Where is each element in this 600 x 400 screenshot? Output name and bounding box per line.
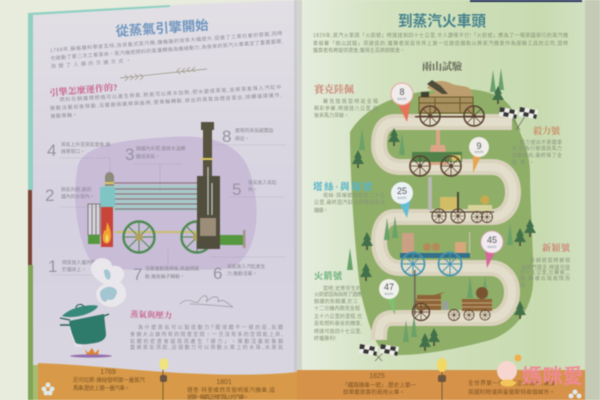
label: Rocket (314, 270, 362, 342)
1830 text (468, 379, 555, 396)
1769: 1769 (100, 369, 116, 376)
pin: 8 km/h: km/h (398, 96, 406, 101)
callout 6: 力,推動活塞。 (227, 270, 257, 277)
callout 2: 熱氣升起,遇到 (61, 186, 91, 193)
callout 6: 蒸氣進入汽缸產生 (227, 263, 266, 270)
intro text: left: 1769年,蘇格蘭科學家瓦特,改良舊式蒸汽機,讓機器的效率大幅提升,促進了工業社會的發展,同時 (50, 30, 283, 54)
callout 3: 3 (125, 145, 134, 164)
pin: 45 km/h: km/h (488, 244, 496, 249)
pin: 25 km/h (391, 182, 413, 218)
label: Cycloped: 塔絲·與瑞號的速度二十五 (323, 192, 385, 199)
1769: 馬車,歷史上第一臺汽車。 (73, 384, 130, 392)
cylinder housing (197, 167, 220, 249)
callout 1: 煤炭放入爐內燃燒 (62, 259, 101, 266)
panel: right timeline band (297, 358, 585, 400)
callout 3 (125, 145, 186, 195)
label: Novelty: 為熱門選手,時速可達 (521, 264, 570, 271)
label: Sans Pareil: 賽克陸佩當時是全場 (323, 98, 378, 105)
callout 5: 內。 (248, 187, 258, 193)
diagram: steam locomotive (88, 122, 246, 252)
train: novelty (400, 232, 470, 276)
wheel front (124, 222, 154, 252)
pin: 9 km/h: km/h (475, 149, 483, 154)
label: Novelty: 新穎號當時被視 (530, 257, 570, 264)
callout 7 (133, 250, 199, 284)
label: Novelty: 圈,鍋爐出現故障而 (520, 275, 570, 282)
intro text: right: 獲獎者有將提供資金,獲得五百英鎊獎金。 (313, 47, 405, 54)
callout 2: 爐內的水管內。 (61, 193, 95, 200)
intro text: right (313, 32, 568, 54)
train: sans pareil (410, 130, 462, 176)
pin: 47 km/h: km/h (385, 291, 393, 296)
callout 4: 過導管口。 (61, 148, 85, 155)
pin: 8 km/h (391, 83, 413, 122)
1801: 1801 (216, 379, 232, 386)
label: Rocket: 五十六公里的里程,也 (314, 313, 362, 320)
left page teal edge strip (28, 5, 170, 190)
pin: 8 km/h: 8 (399, 87, 405, 97)
1830 text: 英國利物浦與曼徹斯特兩個城市。 (468, 388, 555, 396)
text block: steam and pressure: 氣體的密度會提高而產生「壓力」。推動活塞就像鍋 (130, 338, 283, 345)
callout 1: 於爐床上。 (62, 266, 86, 273)
label: Rocket: 終獲勝利! (314, 335, 336, 342)
heading: steam and pressure: 蒸氣與壓力 (130, 309, 172, 320)
timeline bulb (160, 358, 168, 400)
text block: steam and pressure: 為什麼蒸氣可以製造動力?跟液體不一樣的是,氣體 (138, 324, 283, 331)
callout 8: 排出。 (235, 135, 249, 142)
cylinder body over wheel (197, 215, 220, 249)
label: Novelty: 新穎號 (542, 242, 570, 253)
callout 1 (48, 257, 101, 276)
callout 3: 鍋爐內水管,使其水溫轉 (136, 145, 186, 152)
callout 6 (210, 257, 287, 283)
label: Perseverance: 後,因為行駛還過馬力 (512, 145, 562, 152)
label: Rocket: 是有燃料最省的機車, (314, 320, 362, 327)
callout 5: 5 (232, 180, 241, 199)
label: Perseverance (512, 125, 562, 166)
flags: finish top (499, 107, 538, 130)
callout 8: 使用的蒸氣經煙囪 (235, 127, 274, 134)
label: Cycloped: 繼續。 (314, 207, 328, 214)
pin: 9 km/h: 9 (476, 141, 482, 151)
label: Perseverance: 毅力號出不景跟車 (520, 139, 562, 146)
callout 2: 2 (45, 186, 54, 205)
label: Rocket: 時速可達四十七公里, (314, 328, 362, 335)
1825: 1825 (369, 373, 385, 380)
panel: right page (294, 0, 600, 400)
label: Rocket: 火箭號因為採用了適應 (314, 291, 362, 298)
intro text: left (50, 30, 284, 70)
text block: steam and pressure (130, 324, 283, 351)
icon: steam clouds (91, 258, 126, 307)
train: cycloped (428, 177, 494, 223)
purple backdrop blob (75, 137, 257, 270)
left edge illustration strip (28, 190, 38, 400)
train: horse carriage (415, 80, 485, 126)
pin: 25 km/h: km/h (398, 195, 406, 200)
icon: steam pot on flame (60, 304, 112, 358)
callout 5: 蒸氣進入氣缸 (248, 179, 277, 186)
heading: Rainhill trial: 雨山試驗 (422, 60, 463, 73)
label: Perseverance: 毅力號 (533, 125, 560, 136)
callout 7: 7 (133, 265, 142, 284)
pin: 45 km/h: 45 (487, 235, 497, 245)
callout 7: 動,推進輪子轉動。 (145, 273, 185, 280)
train: rocket (412, 270, 492, 320)
pin: 9 km/h (469, 137, 489, 173)
callout 8: 8 (222, 127, 231, 146)
label: Cycloped: 塔絲·與瑞號 (313, 181, 372, 193)
firebox and flame (101, 207, 113, 247)
1825 (342, 373, 416, 396)
callout 6: 6 (213, 264, 222, 283)
callout 4 (47, 141, 111, 175)
pin: 25 km/h: 25 (397, 186, 407, 196)
label: Perseverance: 程獎。 (512, 159, 534, 166)
ornament: wheat divider (120, 67, 207, 81)
tender grid (88, 204, 100, 244)
callout 2 (45, 186, 100, 207)
intro text: left: 改變了人類的交通方式。 (51, 57, 131, 70)
label: Rocket: 十二分鐘內跑完全程 (314, 305, 360, 312)
map: trees (347, 68, 536, 351)
text block: how engine works (49, 84, 282, 120)
piston box (200, 218, 216, 236)
label: Sans Pareil (314, 83, 378, 119)
text block: how engine works: 燃料在鍋爐裡燃燒可以產生熱氣,熱氣可以將水加熱,把水變成蒸氣,並將蒸氣導入汽缸中 (59, 84, 281, 103)
flags: finish bottom (359, 344, 399, 361)
text block: how engine works: 推動活塞前後移動,活塞連接連桿與曲柄,使車輪轉動,排出的蒸氣由煙囪冒出,持續循環運作, (50, 92, 282, 112)
pin: 47 km/h (379, 279, 399, 315)
label: Rocket: 當時,史蒂芬生的 (323, 285, 361, 292)
boiler (100, 172, 197, 211)
heading: how engine works: 引擎怎麼運作的? (49, 81, 118, 98)
label: Rocket: 火箭號 (314, 270, 342, 281)
callout 1: 1 (48, 257, 57, 276)
label: Cycloped (313, 181, 385, 214)
label: Sans Pareil: 賽克陸佩 (314, 83, 354, 96)
title: left: 從蒸氣引擎開始 (115, 16, 210, 39)
1801: 理查·特里維西克發明蒸汽機車,這 (187, 386, 275, 394)
intro text: left: 也啟動了第二次工業革命。蒸汽機把燃料的能量轉換為機械動力,為後來的蒸汽火車奠定了重要基礎, (50, 38, 283, 62)
label: Perseverance: 四輪轉向,最終得了全 (512, 152, 562, 159)
flower (568, 390, 582, 398)
1801 (187, 379, 275, 400)
ornament: swirl (180, 296, 233, 307)
wheel rear (182, 222, 212, 252)
map: hill (350, 89, 533, 355)
callout 8 (215, 127, 287, 146)
intro text: right: 1829年,蒸汽火車頭「火箭號」時速達到四十七公里,令人讚嘆不已!「火箭號」應為了一場英國舉行的蒸汽機 (313, 32, 568, 39)
text block: how engine works: 推動車輪。 (50, 111, 78, 120)
map: winding track (379, 122, 513, 340)
label: Rocket: 鍋爐的新鍋爐,於三 (314, 298, 358, 305)
timeline bulb (437, 358, 447, 400)
intro text: right: 車競賽「雨山試驗」而建造的,獲勝者就是世界上第一位建造鐵軌以將蒸汽機車作為運輸工具的公司,當時 (313, 40, 568, 47)
piston green (220, 230, 246, 248)
label: Sans Pareil: 後來馬力突破。 (314, 112, 349, 119)
flower (42, 382, 54, 396)
callout 7: 活塞推動連桿後,與曲柄連 (145, 265, 199, 272)
pin: 45 km/h (481, 231, 503, 268)
callout 5 (230, 179, 285, 199)
1830 text: 全世界第一條鐵路正式通車,連接 (468, 379, 555, 387)
title: right: 到蒸汽火車頭 (398, 12, 486, 30)
1769 (73, 369, 145, 392)
rod (115, 231, 200, 233)
right margin (585, 0, 600, 400)
1769: 尼可拉斯·庫紐發明第一臺蒸汽 (73, 376, 145, 384)
label: Cycloped: 公里,最終因汽缸出問題而無法 (314, 199, 385, 206)
1825: 「鐵路機車一號」,歷史上第一 (342, 381, 416, 389)
label: Novelty (520, 242, 570, 289)
label: Sans Pareil: 精彩參賽,時速達八公里,但 (314, 105, 378, 112)
callout 4: 蒸氣上升至蒸氣室後,通 (61, 141, 111, 148)
label: Novelty: 四十五公里,比賽第二 (520, 269, 570, 276)
text block: steam and pressure: 蓋被蒸氣頂起,這個動力可以帶動火車上的水珠,水蒸氣 (130, 344, 283, 351)
1825: 部乘載旅客的商用火車。 (343, 388, 405, 396)
callout 3: 變成蒸氣。 (136, 153, 160, 160)
panel: left page (28, 0, 297, 400)
panel: left timeline band (38, 358, 297, 400)
chimney (201, 122, 214, 176)
watermark: baby and brand: 媽咪愛 (522, 365, 583, 388)
label: Novelty: 停。 (520, 282, 528, 289)
pin: 47 km/h: 47 (384, 282, 394, 292)
text block: steam and pressure: 會擴大占據所有的閒置空間。一旦沒有多的空間能上昇, (130, 331, 283, 338)
callout 4: 4 (47, 141, 56, 160)
watermark: baby and brand (497, 354, 583, 388)
